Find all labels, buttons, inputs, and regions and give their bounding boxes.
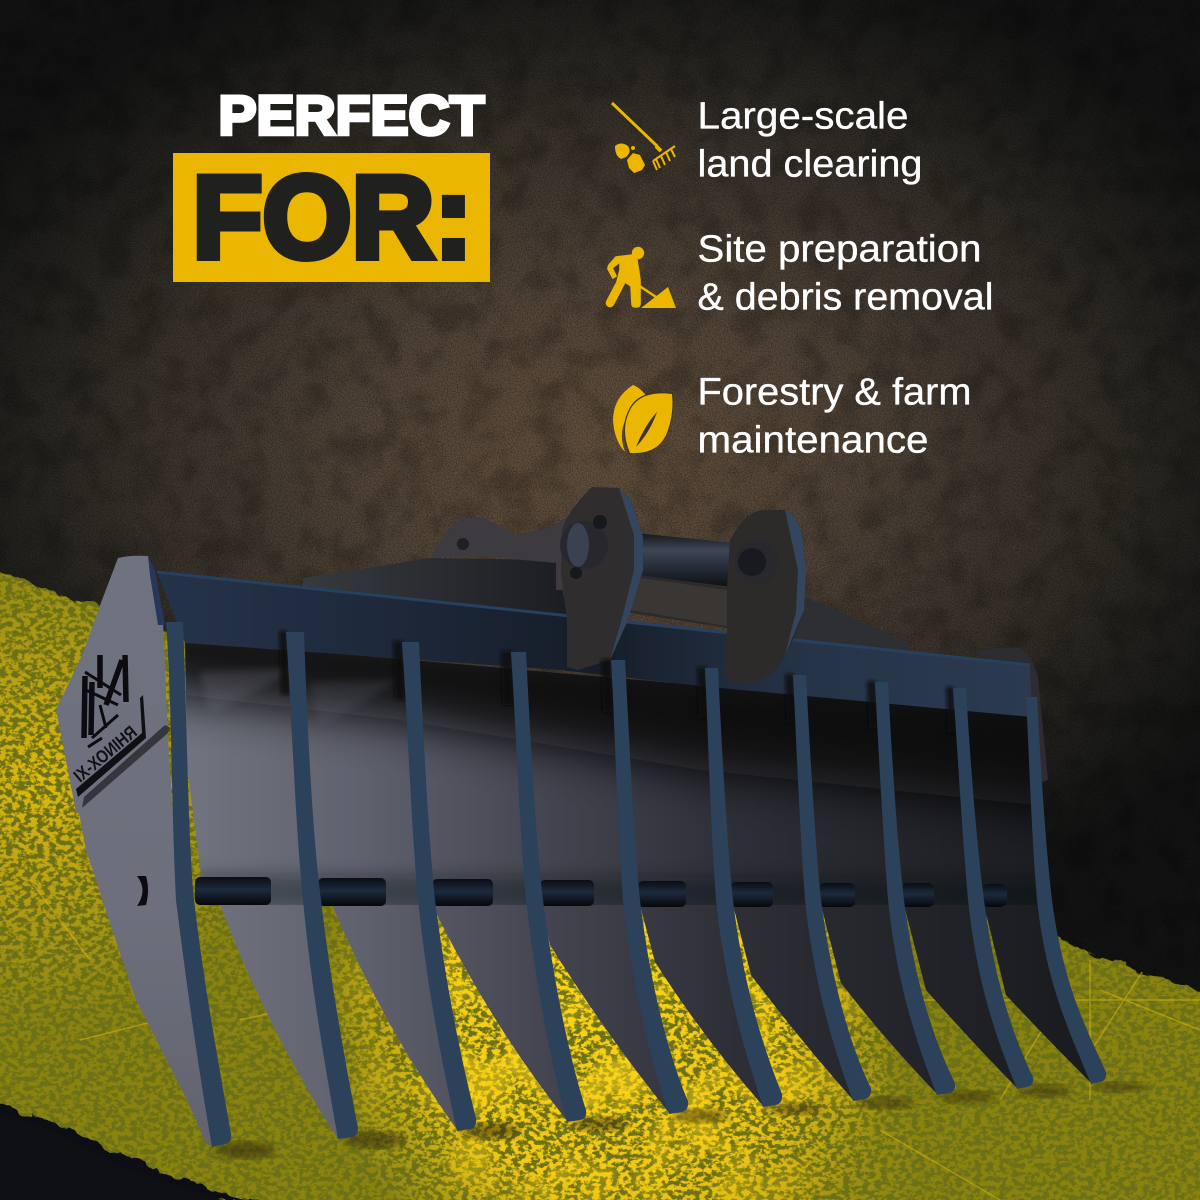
panel shadows bbox=[185, 643, 1037, 905]
rake tine shadows bbox=[279, 631, 956, 732]
brand name: IX-ХОИІНЯ bbox=[70, 722, 141, 786]
front side plate bbox=[56, 556, 212, 1147]
rake back panel bbox=[185, 640, 1050, 905]
text: forestry and farm: Forestry & farm bbox=[698, 372, 972, 414]
icon: worker with shovel bbox=[606, 247, 676, 308]
text: site preparation: & debris removal bbox=[698, 276, 994, 318]
cross pin sections bbox=[195, 877, 1007, 907]
rake tine edges bbox=[166, 622, 1106, 1147]
hitch rear wedge bbox=[780, 590, 909, 660]
rake blades bbox=[196, 905, 1092, 1139]
hitch ear bbox=[431, 513, 600, 590]
hitch wedge plate bbox=[303, 558, 570, 625]
top beam bbox=[157, 572, 1032, 717]
front hitch plate bbox=[561, 487, 643, 670]
text: site preparation: Site preparation bbox=[698, 228, 982, 270]
text: land clearing: land clearing bbox=[698, 144, 922, 186]
rake attachment illustration bbox=[56, 487, 1106, 1147]
icon: rake and rocks bbox=[612, 103, 675, 173]
title badge: FOR: FOR: bbox=[192, 152, 472, 282]
plate logo step bbox=[82, 725, 171, 808]
background: yellow brush stroke bbox=[0, 560, 1200, 1200]
hitch pin bbox=[635, 533, 755, 590]
right end bracket bbox=[976, 648, 1048, 783]
icon: leaf bbox=[613, 385, 672, 453]
rear hitch plate bbox=[625, 510, 806, 683]
title: PERFECT: PERFECT bbox=[218, 84, 485, 146]
brand logo mark bbox=[84, 655, 126, 747]
text: land clearing: Large-scale bbox=[698, 96, 908, 138]
text: forestry and farm: maintenance bbox=[698, 420, 928, 462]
plate slot bbox=[137, 876, 148, 906]
